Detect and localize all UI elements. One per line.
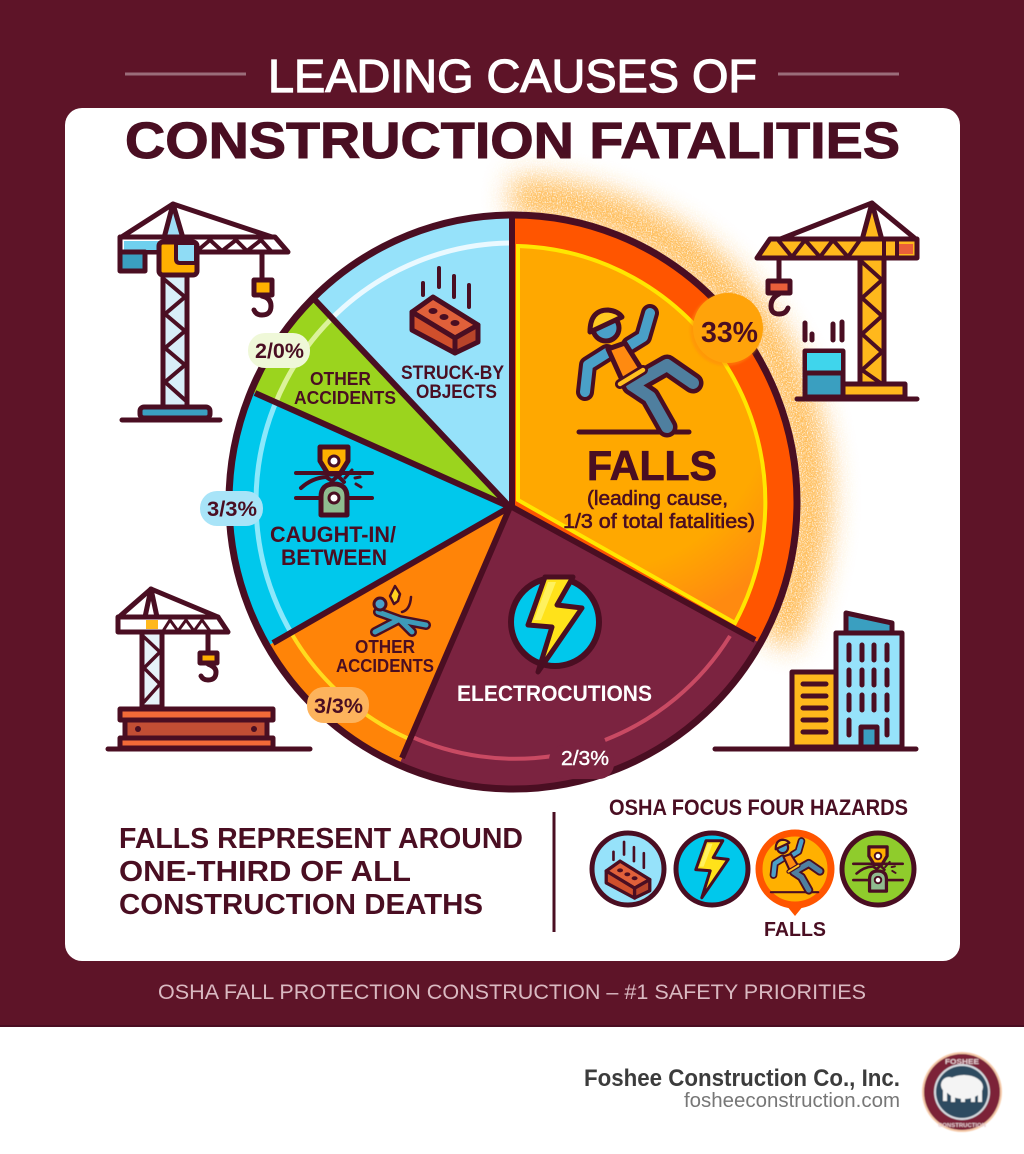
badge: 3/3% blue: 3/3% [207, 498, 257, 521]
segment: struck-by objects [318, 218, 509, 502]
icon: falls highlighted [759, 833, 831, 916]
footer company name: Foshee Construction Co., Inc. [584, 1065, 900, 1092]
badge: 2/0% [248, 333, 310, 368]
icon: crane top-right [757, 203, 917, 399]
segment: falls [515, 218, 794, 642]
icon: crane and platform bottom-left [108, 589, 310, 749]
segment: other accidents green [254, 302, 498, 498]
label: other accidents green [294, 368, 396, 408]
icon: caught-in press [296, 447, 372, 515]
label: falls [563, 442, 755, 533]
label: caught-in between: CAUGHT-IN/ [270, 522, 396, 547]
label: caught-in between: BETWEEN [281, 545, 387, 570]
badge: 2/0%: 2/0% [255, 340, 304, 363]
label: other accidents green: ACCIDENTS [294, 387, 396, 408]
callout: falls statement: ONE-THIRD OF ALL [119, 856, 411, 888]
pie outline [229, 215, 797, 789]
logo: Foshee Construction elephant badge: CONSTRUCTION [938, 1123, 986, 1129]
label: falls: FALLS [587, 442, 717, 489]
icon: caught-in [842, 833, 914, 905]
label: struck-by objects: STRUCK-BY [401, 362, 504, 384]
badge: 3/3% blue [200, 491, 263, 526]
label: falls: FALLS [764, 919, 826, 941]
footer company name [584, 1065, 900, 1112]
label: struck-by objects [401, 362, 504, 403]
label: falls: 1/3 of total fatalities) [563, 511, 755, 533]
icon: fallen person [374, 586, 426, 632]
panel: OSHA focus four hazards [592, 795, 914, 941]
logo: Foshee Construction elephant badge: FOSHEE [945, 1059, 979, 1066]
panel: main white card [65, 108, 960, 961]
label: other accidents orange: OTHER [355, 637, 415, 657]
label: other accidents orange: ACCIDENTS [336, 656, 434, 676]
callout: falls statement: CONSTRUCTION DEATHS [119, 889, 483, 921]
label: other accidents orange [336, 637, 434, 676]
heading: construction fatalities: CONSTRUCTION FATALITIES [125, 112, 900, 169]
badge: 33% [690, 293, 763, 366]
icon: buildings bottom-right [715, 613, 916, 749]
icon: falling brick [412, 268, 478, 353]
title: LEADING CAUSES OF [268, 50, 757, 102]
icon: struck-by [592, 833, 664, 905]
badge: 33%: 33% [701, 317, 758, 349]
segment: other accidents orange [270, 514, 504, 762]
segment: caught-in between [232, 392, 504, 644]
label: electrocutions: ELECTROCUTIONS [457, 681, 652, 706]
segment: electrocutions [400, 510, 758, 786]
callout: falls statement [119, 823, 523, 921]
glow behind falls segment [512, 198, 810, 640]
callout: falls statement: FALLS REPRESENT AROUND [119, 823, 523, 855]
logo: Foshee Construction elephant badge [922, 1052, 1002, 1132]
badge: 2/3% [549, 745, 614, 779]
label: falls: (leading cause, [587, 488, 728, 510]
caption: OSHA FALL PROTECTION CONSTRUCTION – #1 SAFETY PRIORITIES [158, 981, 866, 1004]
label: other accidents green: OTHER [310, 368, 371, 389]
footer band [0, 1026, 1024, 1154]
heading: focus four: OSHA FOCUS FOUR HAZARDS [609, 795, 908, 820]
badge: 2/3%: 2/3% [561, 748, 609, 770]
icon: lightning bolt [511, 577, 599, 672]
icon: falling worker [579, 310, 693, 432]
label: struck-by objects: OBJECTS [416, 381, 497, 403]
badge: 3/3% orange: 3/3% [314, 695, 363, 718]
pie chart [200, 212, 800, 792]
icon: crane top-left [120, 204, 288, 420]
icon: electrocution [676, 833, 748, 905]
spokes [255, 210, 755, 758]
label: caught-in between [270, 522, 396, 570]
footer company name: fosheeconstruction.com [684, 1090, 900, 1112]
badge: 3/3% orange [307, 687, 369, 723]
